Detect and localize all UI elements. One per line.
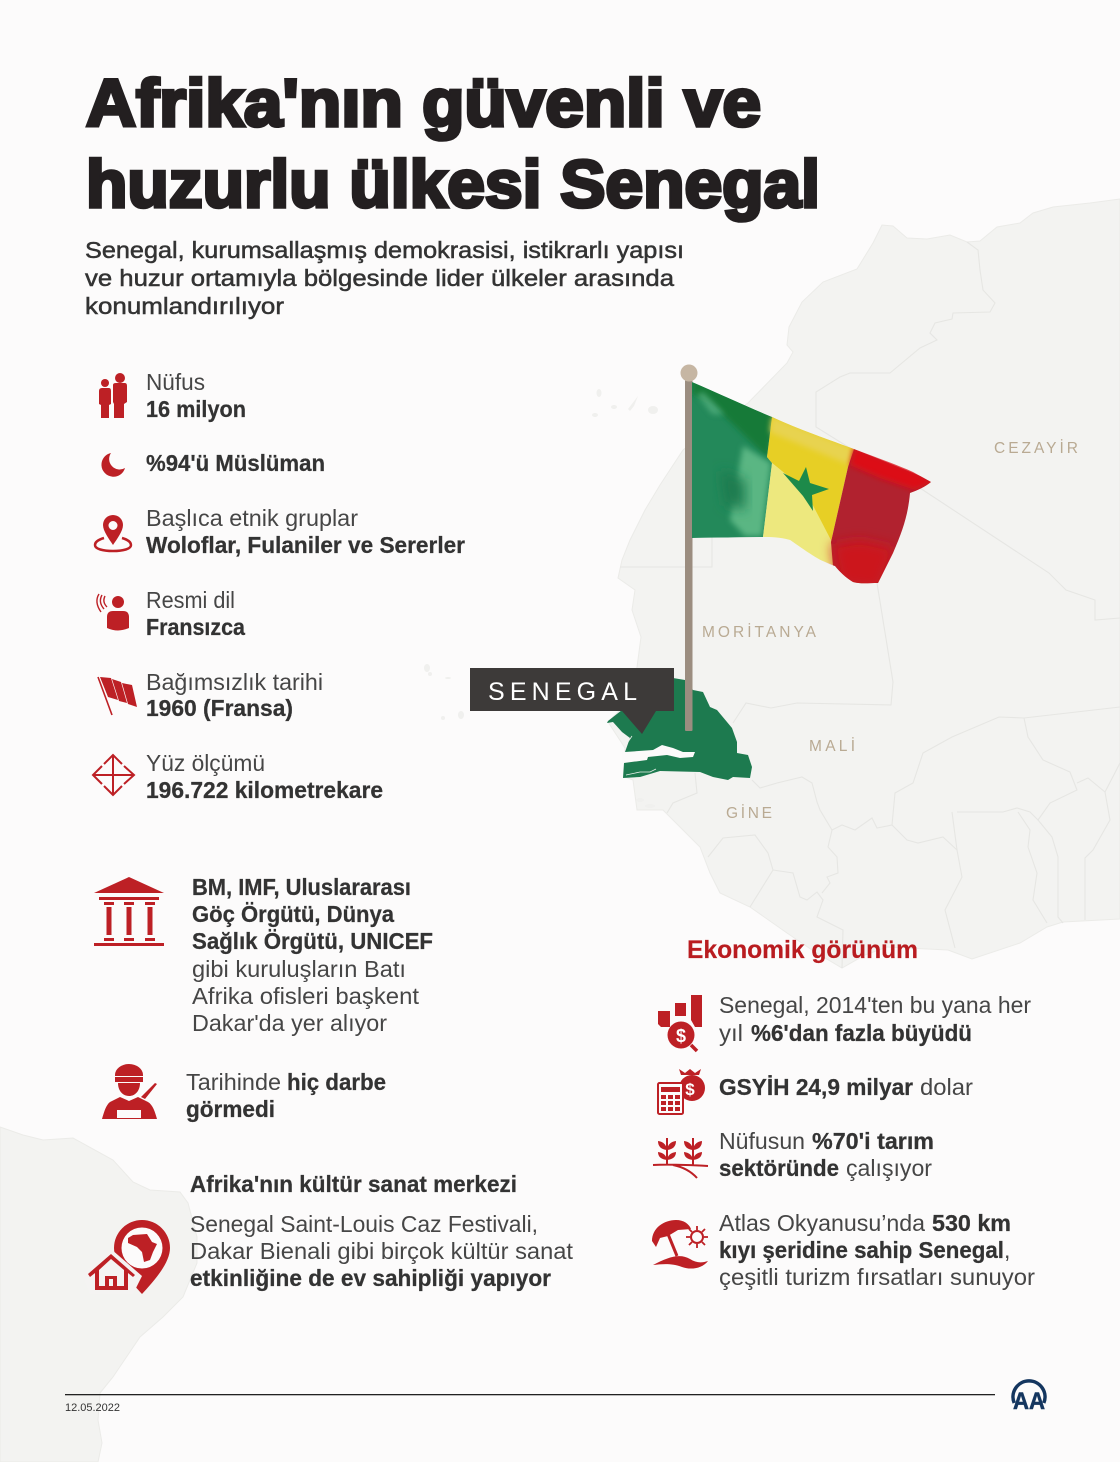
title: Afrika'nın güvenli ve xyxy=(86,66,761,141)
block: international organisations: Göç Örgütü, Dünya xyxy=(192,901,394,927)
economy: agriculture: %70'i tarım xyxy=(812,1128,934,1154)
block: international organisations: Sağlık Örgütü, UNICEF xyxy=(192,928,433,954)
fact: official language: Resmi dil xyxy=(146,587,235,613)
economy: agriculture: sektöründe xyxy=(719,1155,839,1181)
block: culture and arts: etkinliğine de ev sahipliği yapıyor xyxy=(190,1265,551,1291)
block: no coups xyxy=(102,1064,386,1122)
block: international organisations: gibi kuruluşların Batı xyxy=(192,956,406,982)
callout: Senegal label xyxy=(470,668,674,734)
block: international organisations: BM, IMF, Uluslararası xyxy=(192,874,411,900)
block: culture and arts xyxy=(82,1171,574,1294)
subtitle xyxy=(85,237,684,319)
flag pole xyxy=(680,364,698,731)
icon: crescent xyxy=(101,453,125,477)
economy: tourism: kıyı şeridine sahip Senegal xyxy=(719,1237,1004,1263)
economy: tourism: çeşitli turizm fırsatları sunuyor xyxy=(719,1264,1035,1290)
map label: Gine: GİNE xyxy=(726,804,772,822)
fact: independence date xyxy=(98,669,323,721)
icon: soldier xyxy=(102,1064,157,1119)
subtitle: konumlandırılıyor xyxy=(85,293,284,319)
block: no coups: hiç darbe xyxy=(287,1069,386,1095)
economy: agriculture: Nüfusun xyxy=(719,1128,805,1154)
economy: tourism xyxy=(652,1210,1035,1290)
block: no coups: görmedi xyxy=(186,1096,275,1122)
economy: GDP: GSYİH 24,9 milyar xyxy=(719,1074,913,1100)
economy: agriculture: çalışıyor xyxy=(846,1155,932,1181)
icon: people xyxy=(99,373,127,418)
economy: tourism: , xyxy=(1004,1237,1010,1263)
subtitle: ve huzur ortamıyla bölgesinde lider ülkeler arasında xyxy=(85,265,675,291)
icon: flag xyxy=(98,677,137,715)
block: international organisations: Dakar'da yer alıyor xyxy=(192,1010,387,1036)
fact: ethnic groups: Woloflar, Fulaniler ve Sererler xyxy=(146,532,465,558)
icon: location pin xyxy=(95,515,131,551)
map: Senegal highlighted in green xyxy=(607,678,752,780)
economy: GDP xyxy=(658,1069,973,1114)
block: international organisations xyxy=(94,874,433,1036)
icon: growth bars and magnifier: $ xyxy=(676,1026,686,1046)
icon: calculator and money bag: $ xyxy=(685,1080,695,1099)
economy: growth: %6'dan fazla büyüdü xyxy=(751,1020,972,1046)
icon: beach umbrella and sun xyxy=(652,1220,708,1269)
fact: ethnic groups xyxy=(95,505,465,558)
economy: agriculture xyxy=(653,1128,934,1181)
logo: AA: AA xyxy=(1013,1388,1045,1415)
fact: independence date: Bağımsızlık tarihi xyxy=(146,669,323,695)
icon: speaking person xyxy=(97,594,129,630)
icon: institution building xyxy=(94,877,164,946)
fact: ethnic groups: Başlıca etnik gruplar xyxy=(146,505,358,531)
title: huzurlu ülkesi Senegal xyxy=(86,147,820,222)
title xyxy=(86,66,820,222)
economy: growth xyxy=(658,992,1031,1051)
fact: official language xyxy=(97,587,245,640)
map label: Moritanya: MORİTANYA xyxy=(702,623,817,641)
icon: Africa pin and house xyxy=(82,1220,170,1294)
map label: Mali: MALİ xyxy=(809,737,855,755)
callout: Senegal label: SENEGAL xyxy=(488,678,637,706)
date: 12.05.2022 xyxy=(65,1402,120,1414)
economy: GDP: dolar xyxy=(920,1074,973,1100)
economy: tourism: 530 km xyxy=(932,1210,1011,1236)
block: no coups: Tarihinde xyxy=(186,1069,281,1095)
fact: independence date: 1960 (Fransa) xyxy=(146,695,293,721)
icon: crop plants xyxy=(653,1138,708,1178)
fact: area xyxy=(93,750,383,803)
icon: four-way arrows xyxy=(93,755,134,795)
heading: economic outlook: Ekonomik görünüm xyxy=(687,936,918,964)
block: international organisations: Afrika ofisleri başkent xyxy=(192,983,420,1009)
Senegal flag xyxy=(692,376,935,590)
economy: tourism: Atlas Okyanusu’nda xyxy=(719,1210,925,1236)
fact: area: Yüz ölçümü xyxy=(146,750,265,776)
fact: area: 196.722 kilometrekare xyxy=(146,777,383,803)
block: culture and arts: Dakar Bienali gibi birçok kültür sanat xyxy=(190,1238,574,1264)
fact: population: Nüfus xyxy=(146,369,205,395)
footer rule xyxy=(65,1394,995,1395)
fact: official language: Fransızca xyxy=(146,614,245,640)
fact: population: 16 milyon xyxy=(146,396,246,422)
block: culture and arts: Afrika'nın kültür sanat merkezi xyxy=(190,1171,517,1197)
map label: Cezayir: CEZAYİR xyxy=(994,439,1078,457)
icon: growth bars and magnifier xyxy=(658,995,702,1051)
block: culture and arts: Senegal Saint-Louis Caz Festivali, xyxy=(190,1211,538,1237)
icon: calculator and money bag xyxy=(658,1069,705,1114)
economy: growth: yıl xyxy=(719,1020,743,1046)
fact: population xyxy=(99,369,246,422)
fact: religion: %94'ü Müslüman xyxy=(146,450,325,476)
economy: growth: Senegal, 2014'ten bu yana her xyxy=(719,992,1031,1018)
subtitle: Senegal, kurumsallaşmış demokrasisi, istikrarlı yapısı xyxy=(85,237,684,263)
